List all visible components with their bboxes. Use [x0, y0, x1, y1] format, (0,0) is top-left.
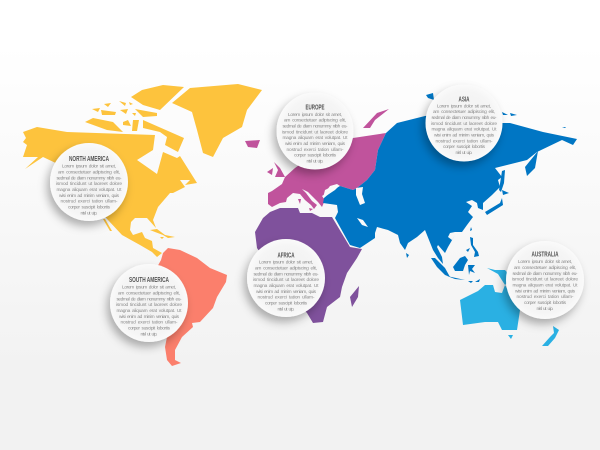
callout: Asia: ASIA: [458, 94, 470, 104]
callout: North America: sedmal de diam nonummy nibh eu-: [56, 175, 122, 181]
callout: Africa: ismod tincidunt ut laoreet dolore: [253, 277, 319, 283]
callout: South America: sedmal de diam nonummy nibh eu-: [116, 296, 182, 302]
callout: Australia: sedmal de diam nonummy nibh eu-: [512, 271, 578, 277]
callout: Africa: am consectetuer adipiscing elit,: [255, 266, 317, 272]
callout: Asia: ismod tincidunt ut laoreet dolore: [431, 121, 497, 127]
callout: North America: Lorem ipsum dolor sit amet,: [62, 164, 116, 170]
region: South America: [150, 248, 227, 366]
callout: Europe: magna aliquam erat volutpat. Ut: [282, 135, 348, 141]
callout: Australia: ismod tincidunt ut laoreet dolore: [512, 277, 578, 283]
region: Europe: [245, 109, 389, 211]
callout: Europe: [276, 92, 354, 170]
callout: Asia: corper suscipit lobortis: [443, 144, 486, 150]
callout: South America: nostrud exerci tation ullam-: [120, 320, 178, 326]
callout: Asia: magna aliquam erat volutpat. Ut: [432, 127, 497, 133]
callout: Asia: Lorem ipsum dolor sit amet,: [437, 103, 491, 109]
callout: Australia: corper suscipit lobortis: [524, 300, 567, 306]
callout: North America: am consectetuer adipiscing elit,: [58, 170, 120, 176]
callout: Europe: nisl ut uip.: [306, 159, 324, 165]
callout: North America: nisl ut uip.: [80, 210, 98, 216]
callout: Europe: Lorem ipsum dolor sit amet,: [288, 112, 342, 118]
region: Africa: [255, 208, 362, 323]
callout: South America: wisi enim ad minim veniam, quis: [119, 314, 180, 320]
region: Australia and Oceania: [460, 268, 559, 346]
Caspian and gulf cuts: [323, 185, 368, 227]
callout: Asia: [426, 84, 502, 162]
callout: North America: ismod tincidunt ut laoreet dolore: [56, 181, 122, 187]
callout: Africa: nisl ut uip.: [278, 306, 294, 312]
callout: Asia: sedmal de diam nonummy nibh eu-: [432, 115, 497, 121]
callout: Australia: Lorem ipsum dolor sit amet,: [518, 259, 572, 265]
callout: Europe: wisi enim ad minim veniam, quis: [285, 141, 346, 147]
callout: North America: NORTH AMERICA: [69, 154, 109, 163]
callout: Europe: EUROPE: [306, 102, 325, 112]
callout: Africa: nostrud exerci tation ullam-: [258, 295, 315, 301]
callout: South America: am consectetuer adipiscing elit,: [118, 290, 180, 296]
callout: North America: [50, 143, 128, 221]
callout: North America: corper suscipit lobortis: [68, 204, 111, 210]
callout: South America: corper suscipit lobortis: [128, 326, 171, 332]
callout: Europe: nostrud exerci tation ullam-: [286, 147, 344, 153]
callout: Africa: corper suscipit lobortis: [265, 300, 308, 306]
callout: Europe: corper suscipit lobortis: [294, 153, 337, 159]
callout: Africa: [247, 239, 325, 317]
callout: South America: Lorem ipsum dolor sit amet,: [122, 284, 176, 290]
callout: South America: [110, 264, 188, 342]
world map: [23, 84, 577, 366]
callout: Australia: [506, 241, 584, 319]
callout: Australia: magna aliquam erat volutpat. Ut: [512, 282, 578, 288]
callout: North America: nostrud exerci tation ullam-: [60, 199, 118, 205]
callout: Africa: sedmal de diam nonummy nibh eu-: [254, 271, 319, 277]
callout: Australia: AUSTRALIA: [532, 250, 559, 258]
callout: Australia: nisl ut uip.: [536, 306, 554, 312]
callout: Asia: am consectetuer adipiscing elit,: [433, 109, 495, 115]
callout: Africa: magna aliquam erat volutpat. Ut: [254, 283, 319, 289]
callout: Australia: am consectetuer adipiscing elit,: [514, 265, 576, 271]
callout: Australia: wisi enim ad minim veniam, quis: [515, 288, 576, 294]
callout: Europe: ismod tincidunt ut laoreet dolore: [282, 129, 348, 135]
callout: Australia: nostrud exerci tation ullam-: [516, 294, 574, 300]
callout: Africa: Lorem ipsum dolor sit amet,: [259, 260, 313, 266]
callout: Africa: wisi enim ad minim veniam, quis: [256, 289, 317, 295]
callout: South America: nisl ut uip.: [140, 331, 158, 337]
callout: Europe: sedmal de diam nonummy nibh eu-: [282, 124, 348, 130]
callout: Africa: AFRICA: [278, 250, 295, 260]
callout: South America: SOUTH AMERICA: [129, 275, 169, 284]
callout: Europe: am consectetuer adipiscing elit,: [284, 118, 346, 124]
region: North America: [23, 84, 262, 257]
callout: South America: magna aliquam erat volutpat. Ut: [116, 308, 182, 314]
region: Asia: [323, 93, 577, 283]
callout: Asia: wisi enim ad minim veniam, quis: [434, 133, 495, 139]
callout: North America: magna aliquam erat volutpat. Ut: [56, 187, 122, 193]
callout: North America: wisi enim ad minim veniam, quis: [59, 193, 120, 199]
callout: Asia: nostrud exerci tation ullam-: [436, 138, 493, 144]
callout: South America: ismod tincidunt ut laoreet dolore: [116, 302, 182, 308]
callout: Asia: nisl ut uip.: [456, 150, 472, 156]
